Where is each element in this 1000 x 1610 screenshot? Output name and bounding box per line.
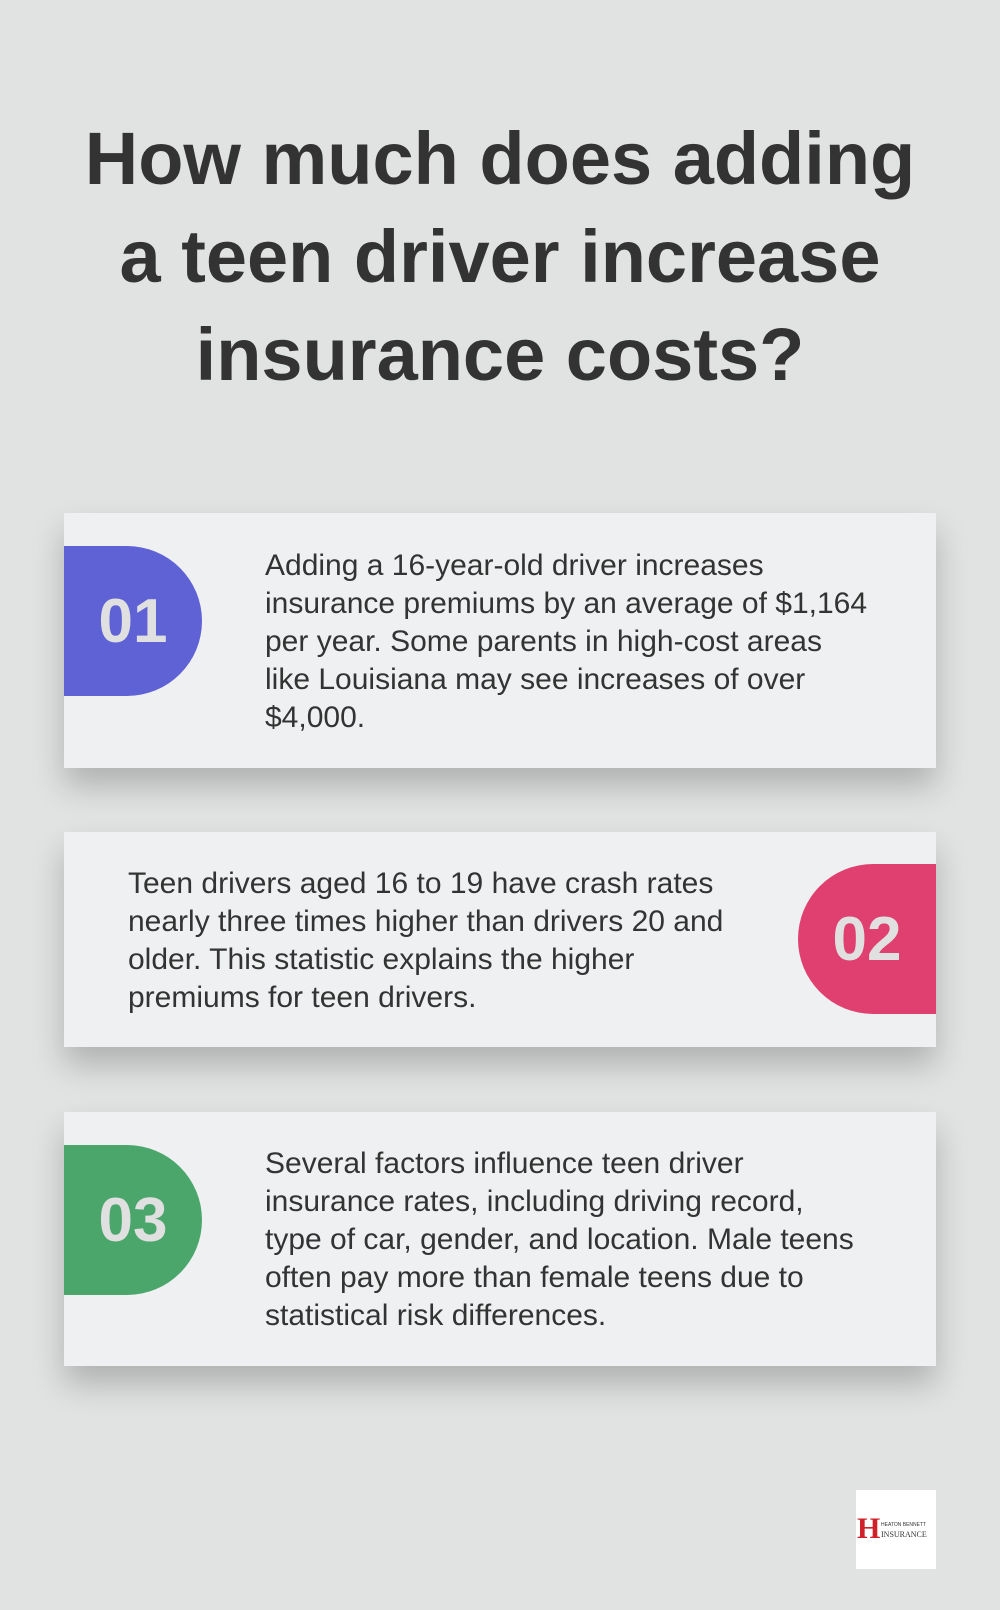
title <box>85 117 915 396</box>
title: a teen driver increase <box>120 215 880 298</box>
text 3: Several factors influence teen driver <box>265 1147 744 1180</box>
title: How much does adding <box>85 117 915 200</box>
badge 03: 03 <box>99 1186 167 1254</box>
logo <box>856 1490 936 1569</box>
card 2 <box>64 832 936 1047</box>
logo: HEATON BENNETT <box>881 1522 926 1528</box>
text 1: like Louisiana may see increases of over <box>265 663 805 696</box>
card 1 <box>64 513 936 768</box>
text 3: statistical risk differences. <box>265 1299 606 1332</box>
logo: INSURANCE <box>881 1530 927 1539</box>
text 3: insurance rates, including driving record, <box>265 1185 804 1218</box>
text 1: $4,000. <box>265 701 365 734</box>
text 3: often pay more than female teens due to <box>265 1261 804 1294</box>
badge 03 <box>64 1145 202 1295</box>
badge 02 <box>798 864 936 1014</box>
logo: H <box>857 1512 880 1545</box>
card 3 <box>64 1112 936 1366</box>
text 2: premiums for teen drivers. <box>128 981 476 1014</box>
text 2 <box>128 867 723 1014</box>
text 1 <box>265 549 867 734</box>
text 3 <box>265 1147 854 1332</box>
text 2: Teen drivers aged 16 to 19 have crash rates <box>128 867 713 900</box>
text 1: insurance premiums by an average of $1,164 <box>265 587 867 620</box>
text 2: older. This statistic explains the higher <box>128 943 634 976</box>
badge 01 <box>64 546 202 696</box>
text 1: per year. Some parents in high-cost areas <box>265 625 822 658</box>
text 3: type of car, gender, and location. Male teens <box>265 1223 854 1256</box>
text 1: Adding a 16-year-old driver increases <box>265 549 764 582</box>
text 2: nearly three times higher than drivers 20 and <box>128 905 723 938</box>
badge 01: 01 <box>99 586 167 656</box>
badge 02: 02 <box>833 904 901 974</box>
title: insurance costs? <box>196 313 804 396</box>
